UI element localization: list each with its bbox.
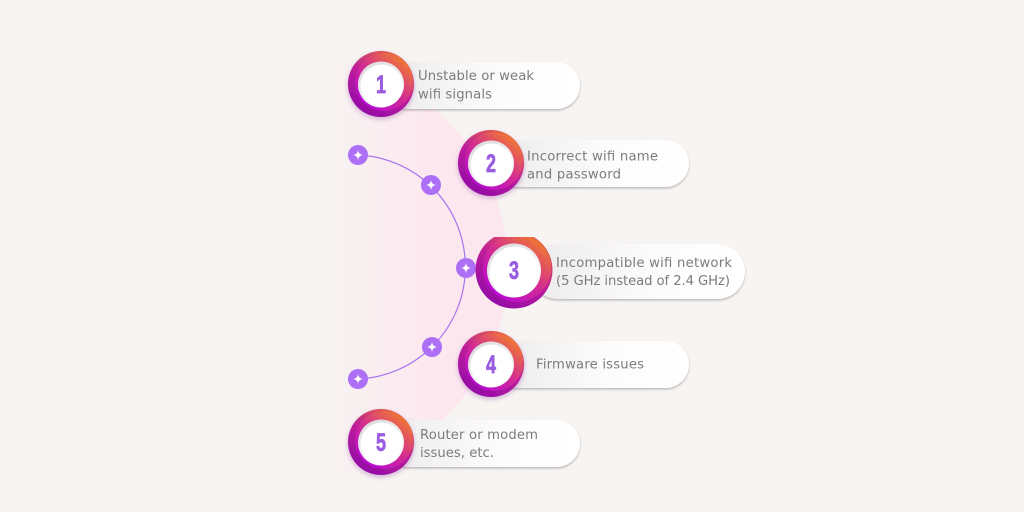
arc node 5 <box>348 369 368 389</box>
badge 2 <box>458 130 524 196</box>
label 1: Unstable or weak <box>418 69 534 84</box>
pill 5 <box>385 420 580 467</box>
item 2 <box>458 130 689 196</box>
label 2: Incorrect wifi name <box>527 150 658 164</box>
arc node 2 <box>421 175 441 195</box>
pill 3 <box>530 244 745 299</box>
label 2: and password <box>527 168 621 182</box>
pill 4 <box>494 341 689 388</box>
arc node 3 <box>456 258 476 278</box>
badge 4 <box>458 331 524 397</box>
badge 2: 2 <box>486 149 496 178</box>
item 1 <box>348 51 580 117</box>
pill 2 <box>494 140 689 187</box>
arc node 1 <box>348 145 368 165</box>
item 3 <box>476 232 745 308</box>
item 5 <box>348 409 580 475</box>
connector arc <box>358 155 465 379</box>
label 4: Firmware issues <box>536 358 644 372</box>
badge 1 <box>348 51 414 117</box>
badge 1: 1 <box>376 70 386 99</box>
label 3: Incompatible wifi network <box>556 256 732 271</box>
badge 5 <box>348 409 414 475</box>
pink semicircle backdrop <box>88 58 508 478</box>
label 3: (5 GHz instead of 2.4 GHz) <box>556 274 730 289</box>
badge 3 <box>476 232 552 308</box>
label 1: wifi signals <box>418 88 492 102</box>
badge 4: 4 <box>486 350 496 379</box>
badge 3: 3 <box>509 256 519 285</box>
pill 1 <box>385 62 580 109</box>
label 5: Router or modem <box>420 428 538 443</box>
badge 5: 5 <box>376 428 386 457</box>
arc node 4 <box>422 337 442 357</box>
label 5: issues, etc. <box>420 446 494 461</box>
item 4 <box>458 331 689 397</box>
